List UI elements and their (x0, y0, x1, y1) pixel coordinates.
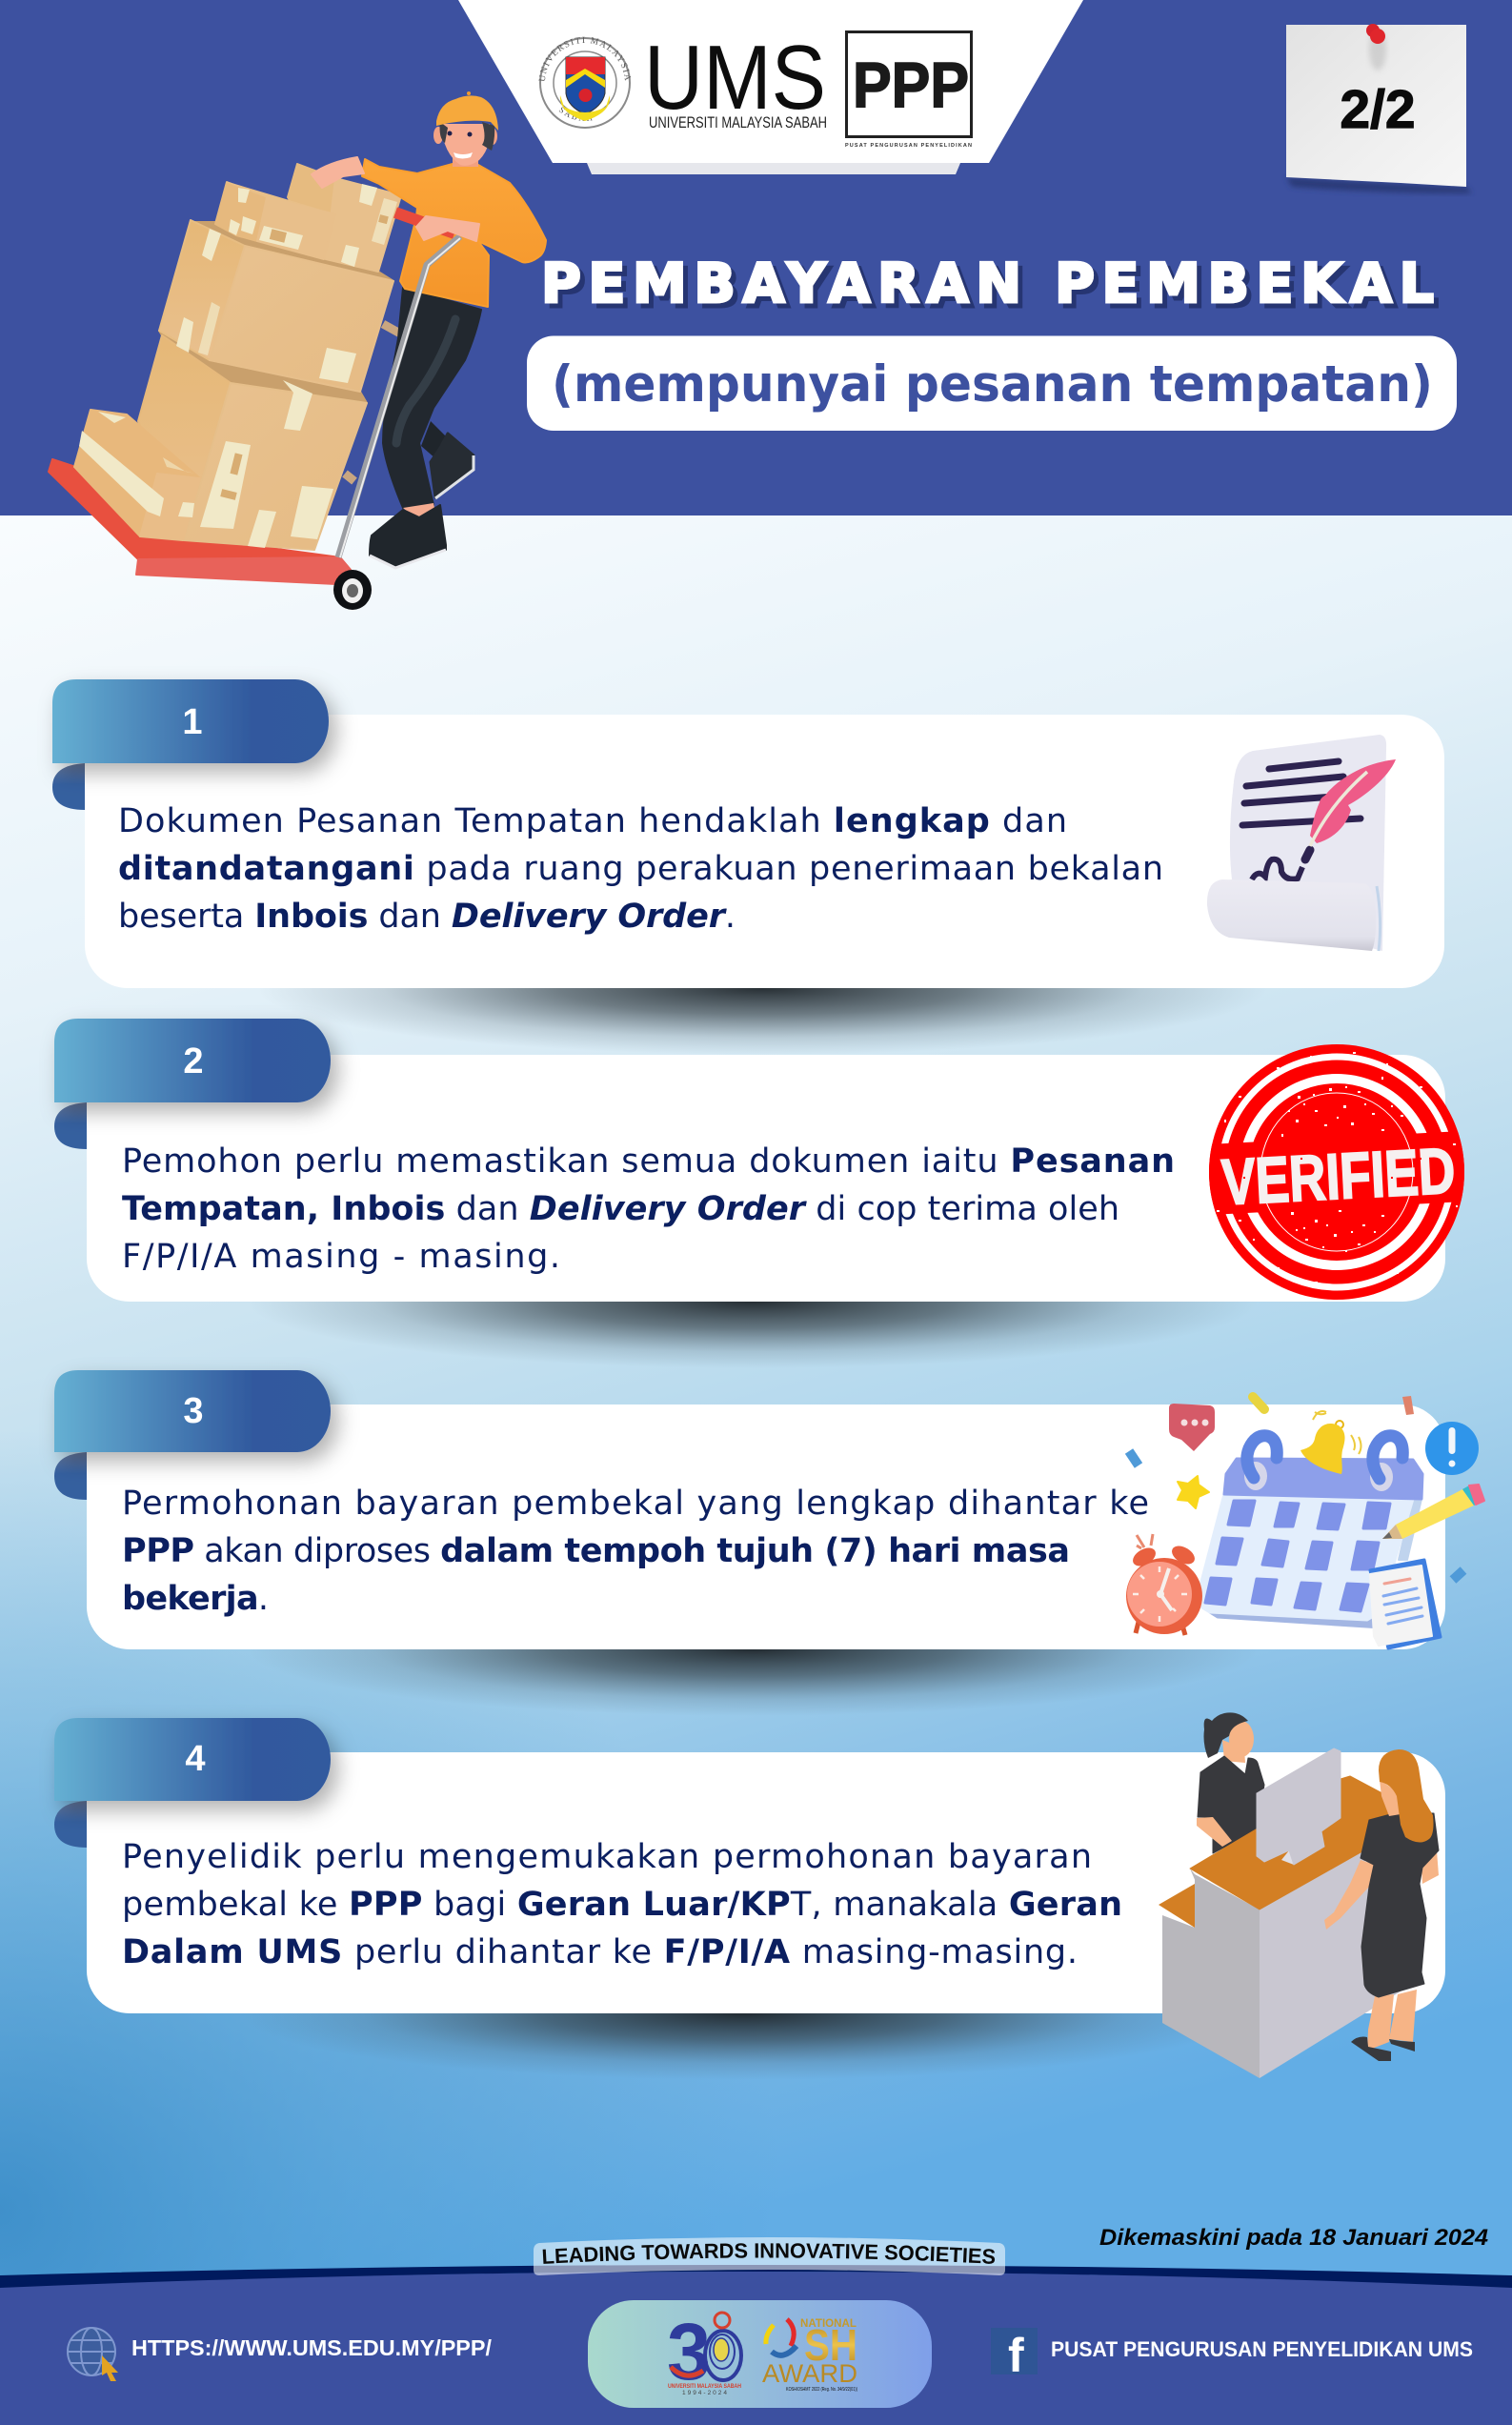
step 3 text: bekerja. (122, 1580, 269, 1618)
bottom small box (74, 410, 200, 536)
facebook page (991, 2328, 1473, 2382)
logo: UMS crest (539, 36, 631, 129)
receptionist (1197, 1712, 1264, 1853)
logo: National OSH Award: KOSH/OSHMT 2022 (Reg. No. 34/9/22(01)) (786, 2387, 857, 2393)
website link (68, 2328, 493, 2381)
middle box (159, 220, 245, 360)
card shadow (257, 988, 1267, 1122)
step 2 text: Tempatan, Inbois dan Delivery Order di cop terima oleh (122, 1190, 1119, 1228)
desk (1159, 1776, 1401, 2078)
hand on handle (416, 216, 479, 241)
panel: step 4 (54, 1712, 1445, 2147)
tagline pill: LEADING TOWARDS INNOVATIVE SOCIETIES (543, 2243, 995, 2264)
icon: chat bubble (1169, 1404, 1215, 1451)
step 1 text: beserta Inbois dan Delivery Order. (118, 898, 736, 936)
step 3 text: PPP akan diproses dalam tempoh tujuh (7) hari masa (122, 1532, 1070, 1570)
red grip and trolley handle (338, 212, 460, 557)
step 1 text (118, 802, 1163, 936)
step 1 text: Dokumen Pesanan Tempatan hendaklah lengkap dan (118, 802, 1067, 840)
step 2 text: Pemohon perlu memastikan semua dokumen iaitu Pesanan (122, 1142, 1175, 1181)
logo: UMS 30 years: UNIVERSITI MALAYSIA SABAH (668, 2384, 741, 2390)
ribbon tab 3: 3 (183, 1391, 204, 1431)
logo pill: 30 years and OSH award (588, 2300, 932, 2408)
logo: PPP: PUSAT PENGURUSAN PENYELIDIKAN (845, 143, 972, 149)
back leg and shoe (421, 421, 474, 498)
stamp speckles (1217, 1052, 1458, 1288)
calendar rings (1244, 1436, 1402, 1491)
icon: verified stamp (1206, 1044, 1469, 1300)
icon: calendar with bell, clock and pencil (1126, 1396, 1484, 1648)
top left box (215, 182, 267, 241)
customer (1324, 1749, 1439, 2061)
ribbon tab 3 (54, 1370, 331, 1500)
facebook page: PUSAT PENGURUSAN PENYELIDIKAN UMS (1051, 2337, 1473, 2361)
tapes and labels (79, 184, 397, 548)
note: page number 2/2: 2/2 (1340, 79, 1416, 140)
step 2 text (122, 1142, 1175, 1276)
ribbon tab 4 (54, 1718, 331, 1848)
logo: UMS crest: UNIVERSITI MALAYSIA (539, 36, 631, 82)
shirt (362, 159, 546, 307)
ribbon tab 4: 4 (185, 1739, 206, 1779)
logo: UMS crest: SABAH (558, 107, 593, 121)
logo: PPP: PPP (853, 50, 969, 121)
icon: red pin (1366, 24, 1385, 44)
step 4 text (122, 1838, 1122, 1971)
ribbon tab 2 (54, 1019, 331, 1149)
logo: National OSH Award: SH (804, 2320, 857, 2370)
logo: National OSH Award: NATIONAL (800, 2316, 857, 2330)
ribbon tab 1: 1 (182, 702, 203, 742)
note: page number 2/2 (1286, 24, 1472, 193)
step 4 text: Penyelidik perlu mengemukakan permohonan bayaran (122, 1838, 1092, 1876)
footer wave band (0, 2265, 1512, 2425)
icon: document and quill (1207, 735, 1396, 951)
updated date: Dikemaskini pada 18 Januari 2024 (1099, 2225, 1488, 2251)
step 3 text: Permohonan bayaran pembekal yang lengkap dihantar ke (122, 1485, 1149, 1523)
logo: UMS wordmark: UMS (644, 27, 826, 129)
icon: globe with cursor (68, 2328, 118, 2381)
logo: UMS 30 years: 3 (667, 2307, 711, 2396)
box seams (159, 331, 367, 403)
head and cap (433, 91, 498, 167)
ribbon tab 1 (52, 679, 329, 810)
logo plate (458, 0, 1083, 174)
box label marks (220, 214, 389, 500)
front lower leg and shoe (370, 503, 446, 568)
confetti (1129, 1396, 1463, 1580)
panel: step 3 (54, 1370, 1484, 1783)
step 3 text (122, 1485, 1149, 1618)
illustration: reception desk (1159, 1712, 1439, 2078)
logo: UMS 30 years: 1994-2024 (682, 2390, 727, 2396)
logo: National OSH Award: AWARD (762, 2359, 857, 2388)
logo: UMS 30 years (667, 2307, 741, 2396)
arm on top box: hand (312, 157, 364, 188)
website link: HTTPS://WWW.UMS.EDU.MY/PPP/ (131, 2335, 493, 2360)
icon: bell (1300, 1411, 1361, 1474)
lower box (138, 335, 231, 540)
wheel (333, 570, 372, 610)
icon: facebook (991, 2328, 1038, 2382)
header band (0, 0, 1512, 515)
icon: star (1178, 1476, 1209, 1508)
icon: note sheet (1370, 1560, 1441, 1648)
title: PEMBAYARAN PEMBEKAL (541, 253, 1434, 315)
trolley bars (345, 324, 400, 481)
logo: PPP (845, 32, 972, 149)
speckles inside lettering (1243, 1158, 1421, 1183)
subtitle pill (527, 335, 1457, 431)
step 4 text: pembekal ke PPP bagi Geran Luar/KPT, manakala Geran (122, 1886, 1122, 1924)
trousers (383, 288, 481, 508)
panel: step 1 (52, 679, 1444, 1122)
step 2 text: F/P/I/A masing - masing. (122, 1238, 560, 1276)
calendar tiles (1205, 1501, 1390, 1611)
step 1 text: ditandatangani pada ruang perakuan penerimaan bekalan (118, 850, 1163, 888)
logo: UMS wordmark: UNIVERSITI MALAYSIA SABAH (649, 114, 827, 131)
boxes (74, 164, 401, 550)
logo: National OSH Award (762, 2316, 857, 2393)
illustration: delivery man with hand truck and boxes (49, 91, 546, 610)
ribbon tab 2: 2 (183, 1041, 204, 1081)
hand truck platform (49, 459, 351, 584)
icon: facebook: f (1008, 2329, 1024, 2382)
monitor (1257, 1748, 1341, 1865)
subtitle pill: (mempunyai pesanan tempatan) (552, 355, 1433, 414)
icon: pencil (1382, 1485, 1484, 1539)
panel: step 2 (54, 1019, 1469, 1435)
top right box (288, 164, 335, 259)
icon: exclamation bubble (1425, 1422, 1479, 1475)
step 4 text: Dalam UMS perlu dihantar ke F/P/I/A masing-masing. (122, 1933, 1078, 1971)
icon: alarm clock (1126, 1534, 1202, 1635)
